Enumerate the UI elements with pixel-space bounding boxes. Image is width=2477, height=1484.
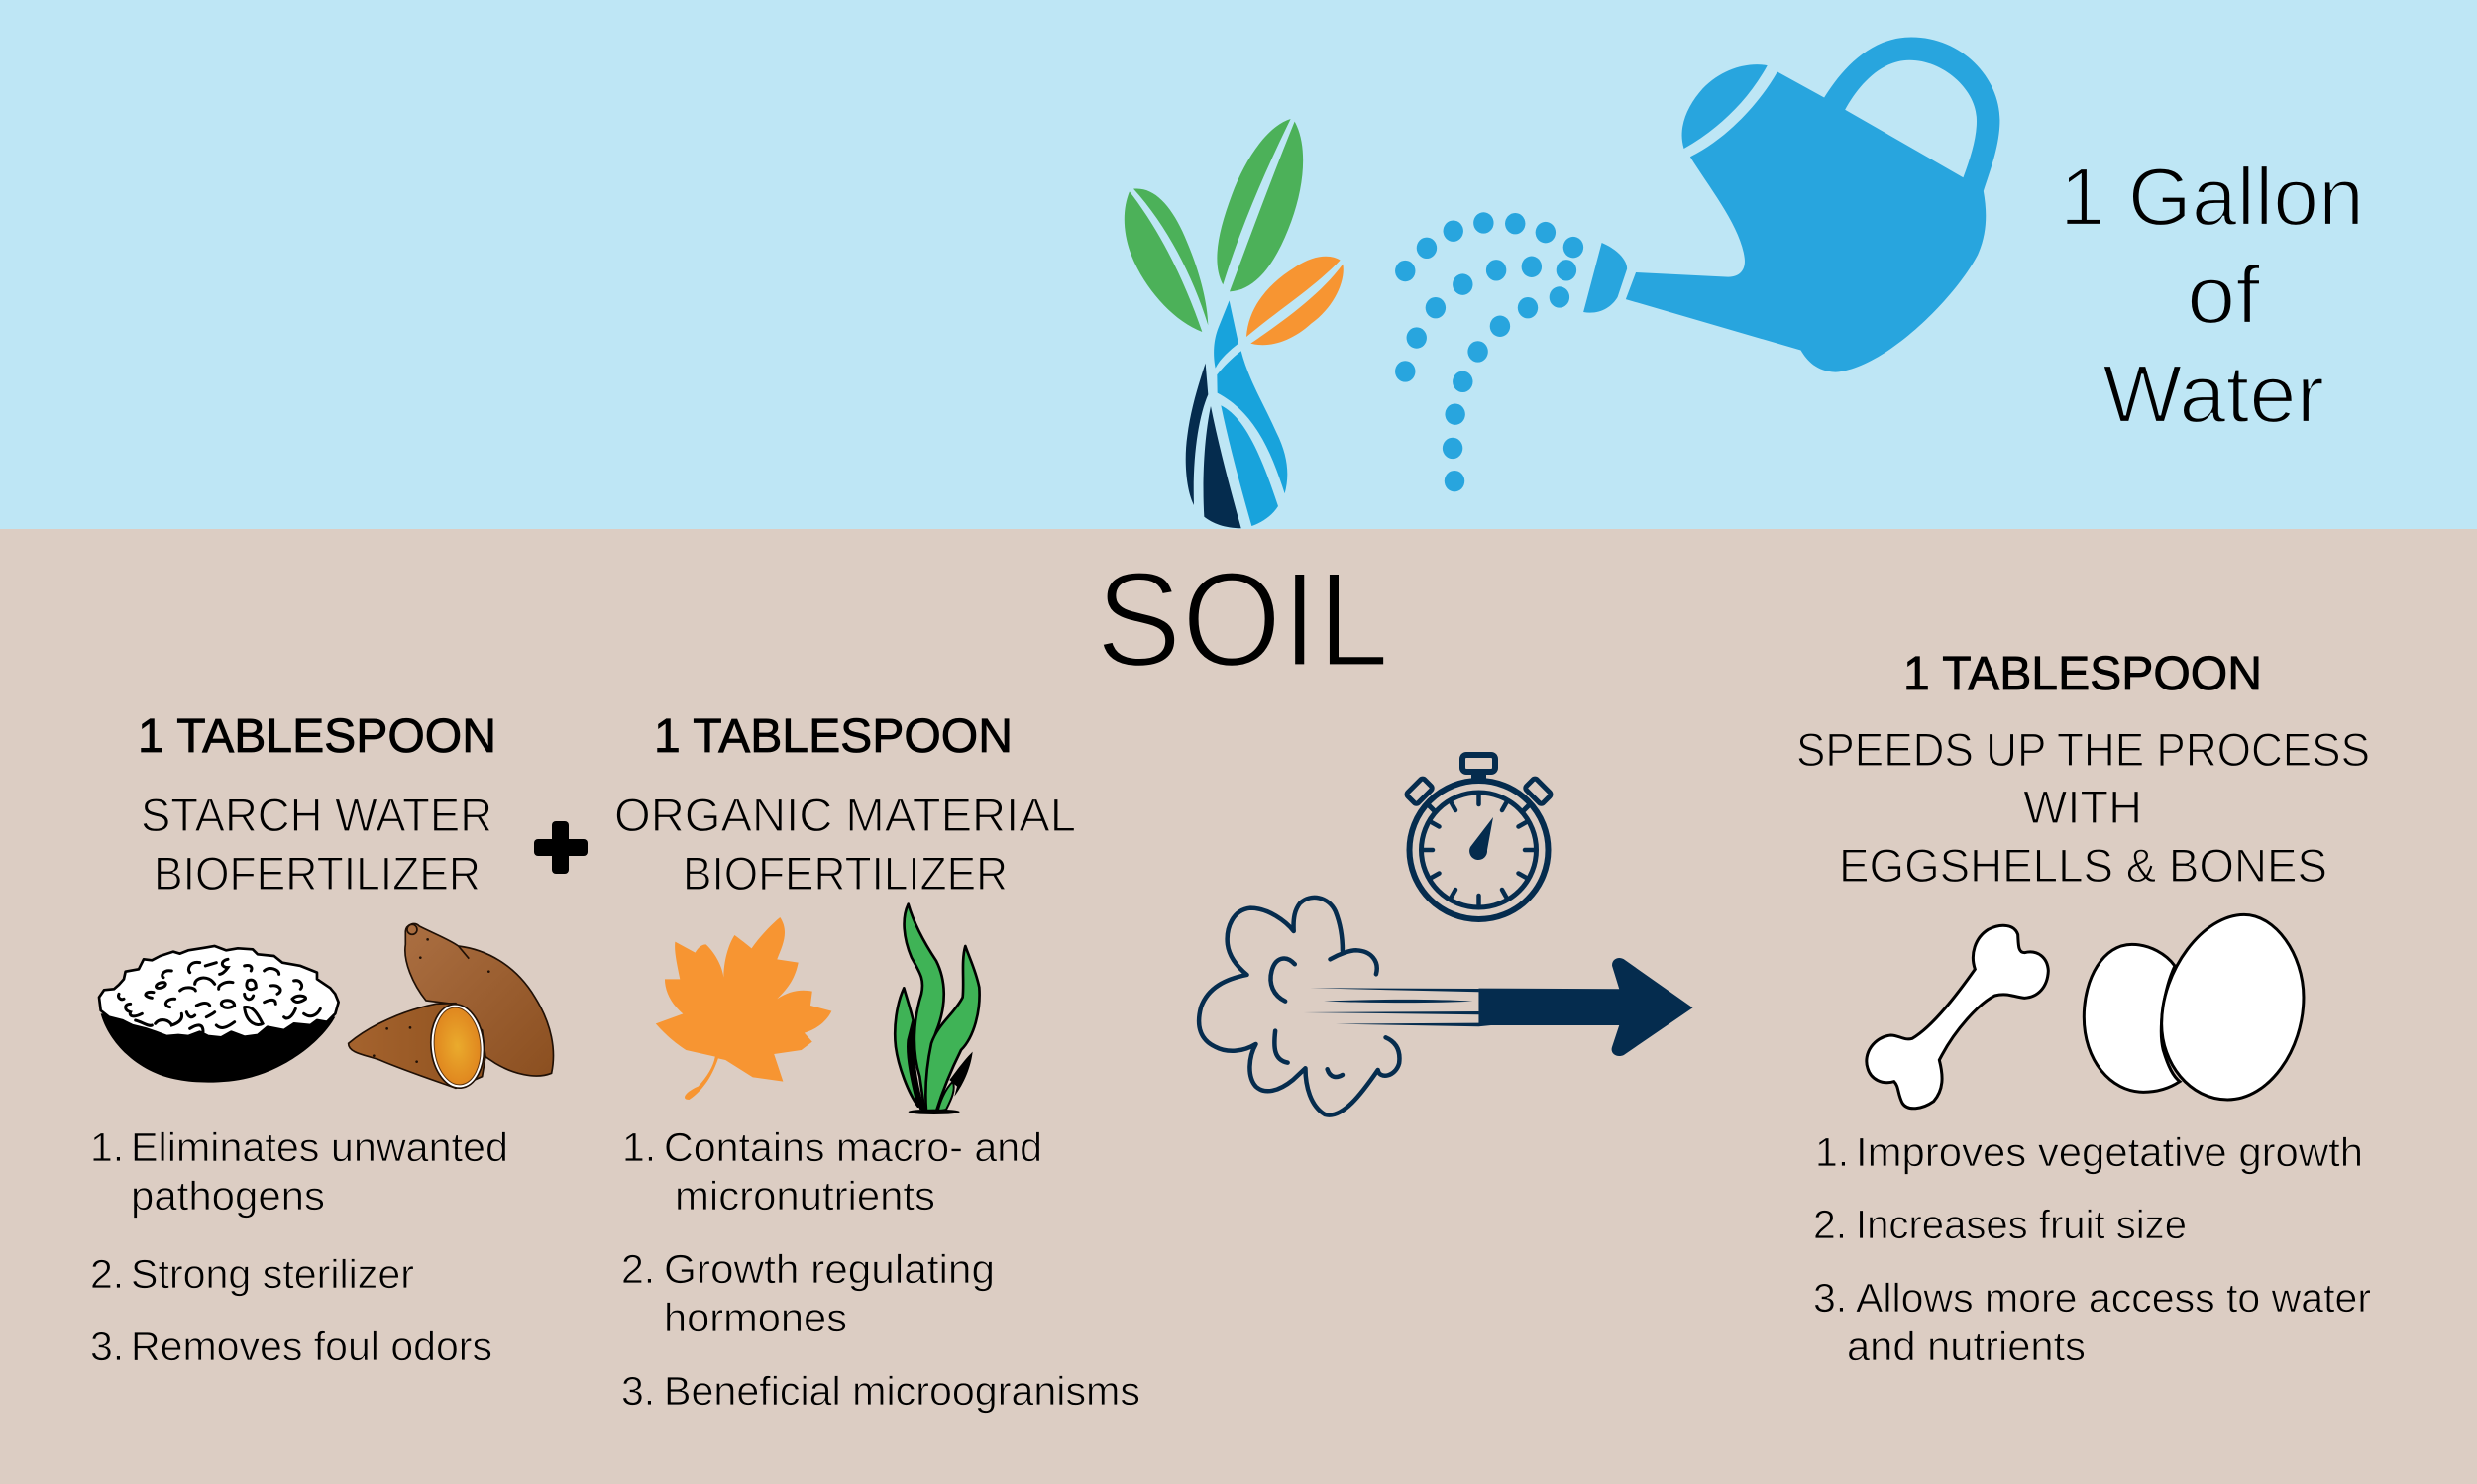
icon: bone <box>1867 925 2048 1109</box>
list: accelerator benefits: 1. <box>1815 1129 1849 1175</box>
icon: watering can <box>1583 37 1999 372</box>
list: organic benefits: Beneficial microogranisms <box>664 1368 1140 1414</box>
heading: speeds up the process: EGGSHELLS & BONES <box>1839 839 2327 892</box>
icon: eggs <box>2084 914 2304 1100</box>
list: accelerator benefits: 2. <box>1813 1202 1847 1247</box>
heading: speeds up the process: WITH <box>2023 781 2142 833</box>
list: starch benefits: 3. <box>90 1324 124 1369</box>
title: soil: SOIL <box>1096 544 1389 694</box>
icon: stopwatch <box>1406 755 1552 919</box>
list: organic benefits: Growth regulating <box>664 1246 995 1292</box>
list: starch benefits <box>90 1124 508 1369</box>
list: organic benefits: micronutrients <box>675 1173 935 1219</box>
panel: organic material biofertilizer <box>614 710 1140 1414</box>
list: starch benefits: Strong sterilizer <box>131 1251 414 1297</box>
heading: accelerator dose: 1 TABLESPOON <box>1903 648 2262 700</box>
list: accelerator benefits: 3. <box>1813 1275 1847 1321</box>
panel: soil background <box>0 529 2477 1484</box>
heading: speeds up the process: SPEEDS UP THE PROCESS <box>1796 723 2370 776</box>
panel: sky background <box>0 0 2477 529</box>
text: 1 gallon of water <box>2060 151 2364 440</box>
icon: rice bowl <box>99 946 339 1083</box>
list: accelerator benefits: Increases fruit size <box>1856 1202 2187 1247</box>
panel: starch water biofertilizer <box>90 710 553 1369</box>
panel: eggshells and bones <box>1796 648 2371 1369</box>
list: starch benefits: pathogens <box>131 1173 325 1219</box>
list: accelerator benefits: Allows more access to water <box>1856 1275 2371 1321</box>
icon: air puff and speed arrow <box>1199 898 1693 1115</box>
list: organic benefits: 2. <box>621 1246 655 1292</box>
list: accelerator benefits: Improves vegetative growth <box>1856 1129 2363 1175</box>
icon: plant seedling <box>1125 119 1344 528</box>
heading: organic dose: 1 TABLESPOON <box>654 710 1013 763</box>
list: organic benefits: Contains macro- and <box>664 1124 1042 1170</box>
heading: starch water biofertilizer: STARCH WATER <box>141 789 492 841</box>
list: organic benefits: 3. <box>621 1368 655 1414</box>
list: starch benefits: 2. <box>90 1251 124 1297</box>
heading: organic material biofertilizer <box>614 789 1076 900</box>
heading: starch water biofertilizer <box>141 789 492 900</box>
heading: organic material biofertilizer: BIOFERTILIZER <box>683 847 1008 900</box>
icon: seaweed <box>895 904 980 1114</box>
text: 1 gallon of water: of <box>2187 249 2261 341</box>
list: starch benefits: Eliminates unwanted <box>131 1124 508 1170</box>
text: 1 gallon of water: 1 Gallon <box>2060 151 2364 243</box>
icon: plus sign <box>534 821 588 874</box>
list: accelerator benefits: and nutrients <box>1847 1324 2086 1369</box>
icon: sweet potato <box>349 924 553 1090</box>
list: starch benefits: 1. <box>90 1124 124 1170</box>
list: organic benefits <box>621 1124 1140 1414</box>
list: organic benefits: 1. <box>622 1124 656 1170</box>
heading: starch water biofertilizer: BIOFERTILIZER <box>154 847 481 900</box>
heading: starch dose: 1 TABLESPOON <box>138 710 496 763</box>
icon: water drops <box>1395 212 1583 491</box>
heading: speeds up the process <box>1796 723 2370 892</box>
list: organic benefits: hormones <box>664 1295 847 1340</box>
list: accelerator benefits <box>1813 1129 2371 1369</box>
icon: orange leaf <box>656 917 831 1100</box>
text: 1 gallon of water: Water <box>2102 348 2324 440</box>
heading: organic material biofertilizer: ORGANIC MATERIAL <box>614 789 1076 841</box>
list: starch benefits: Removes foul odors <box>131 1324 492 1369</box>
